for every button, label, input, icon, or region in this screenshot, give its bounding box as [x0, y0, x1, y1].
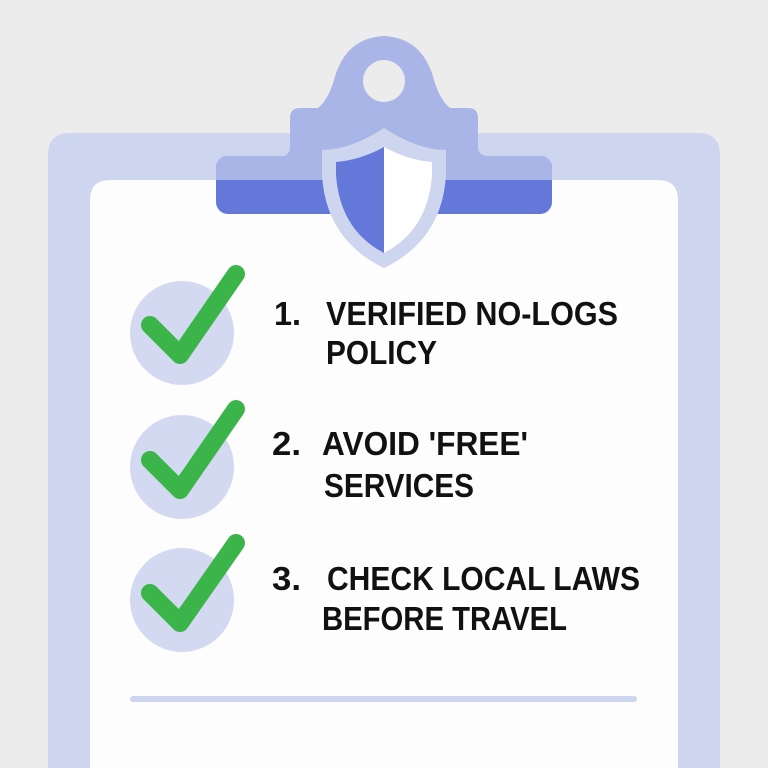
text 3: BEFORE TRAVEL	[322, 600, 567, 637]
text 1: POLICY	[326, 334, 437, 371]
text 3: 3.	[272, 560, 301, 597]
item 3	[130, 543, 640, 652]
item 1	[130, 274, 618, 385]
text 2: AVOID 'FREE'	[322, 425, 528, 462]
text 1: VERIFIED NO-LOGS	[326, 295, 618, 332]
item 2	[130, 409, 528, 519]
text 3	[272, 560, 640, 637]
paper	[90, 180, 678, 768]
text 1: 1.	[274, 295, 301, 332]
text 1	[274, 295, 618, 371]
clip	[216, 36, 552, 214]
text 2	[272, 425, 528, 504]
text 2: SERVICES	[324, 467, 474, 504]
icon: check 1	[130, 274, 236, 385]
text 3: CHECK LOCAL LAWS	[327, 560, 640, 597]
text 2: 2.	[272, 425, 301, 462]
icon: shield	[322, 128, 446, 268]
icon: check 3	[130, 543, 236, 652]
icon: check 2	[130, 409, 236, 519]
clipboard board	[48, 133, 720, 768]
